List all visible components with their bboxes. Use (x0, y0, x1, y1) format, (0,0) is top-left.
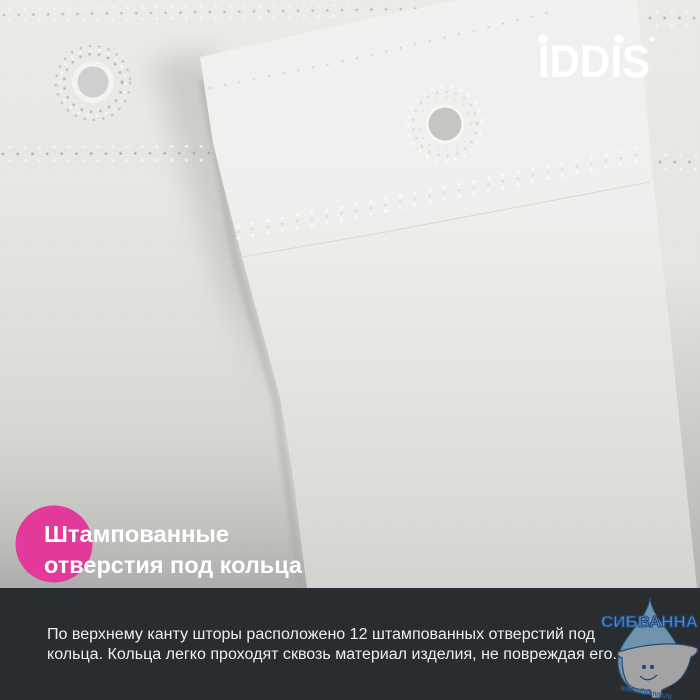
body text: По верхнему канту шторы расположено 12 штампованных отверстий под (47, 626, 595, 643)
front curtain panel (200, 0, 697, 588)
back curtain: top stamped dot row (4, 5, 455, 21)
watermark bath face (640, 665, 657, 680)
watermark: Sibvanna logo (601, 598, 698, 700)
shadow under front panel (198, 80, 304, 588)
watermark name: СИБВАННА (601, 614, 698, 631)
heading: отверстия под кольца (44, 552, 302, 578)
pink accent circle (16, 506, 92, 582)
dark footer band (0, 588, 700, 700)
back curtain: lower stamped dot row (3, 146, 215, 161)
right curtain fold dot rows (650, 12, 700, 169)
logo: IDDIS: IDDIS (538, 36, 650, 87)
back curtain: grommet hole with stamped ring (56, 46, 130, 120)
panel top faint dot row (210, 10, 560, 88)
body text: кольца. Кольца легко проходят сквозь материал изделия, не повреждая его. (47, 646, 617, 663)
watermark drop (618, 598, 681, 694)
watermark bath (618, 644, 697, 698)
body text (47, 626, 617, 663)
panel crease line (242, 182, 650, 257)
heading (44, 521, 302, 578)
panel grommet hole with stamped ring (408, 87, 482, 161)
panel lower stamped dot row (238, 146, 650, 238)
heading: Штампованные (44, 521, 229, 547)
